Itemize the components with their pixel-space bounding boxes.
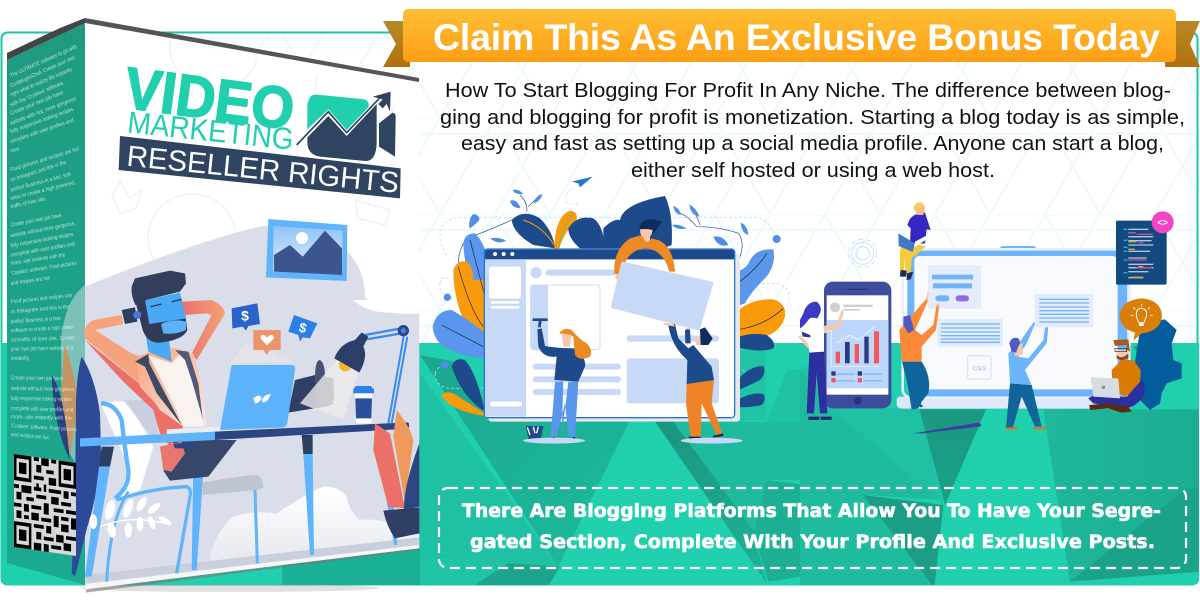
box side text: complete with user profiles and [10, 118, 75, 145]
lamp shade [334, 332, 368, 373]
box side text: 'Cookies' software. Food pictures [10, 261, 77, 277]
bubble: dollar right [288, 315, 317, 342]
illustration: dashboard team [798, 202, 1182, 433]
dashed callout [439, 488, 1186, 568]
plant: right foliage [373, 410, 419, 538]
bubble: heart [253, 330, 281, 355]
chair [89, 400, 263, 582]
ground facets, left half [420, 350, 820, 586]
QR code [14, 454, 76, 556]
light cone [230, 342, 293, 363]
jacket lapel right [175, 350, 203, 418]
torso [135, 348, 207, 427]
box side text: Create your own job have [10, 213, 62, 229]
callout text [462, 500, 1161, 553]
watch [122, 307, 137, 324]
ground under box [282, 440, 420, 585]
box side text: more. site instantly with the [10, 252, 66, 267]
panel: teal low-poly ground [1, 342, 1200, 588]
box side text: website without more gorgeous, [9, 221, 77, 239]
browser title bar [485, 250, 734, 259]
box top edge [85, 18, 419, 82]
ribbon: right tail [1165, 21, 1200, 67]
right arm [182, 300, 225, 360]
ribbon banner [383, 9, 1200, 67]
box side text: Create your own job have [11, 375, 63, 382]
person: woman at phone [798, 302, 844, 420]
box side text: with the 'Cookies' software. [9, 80, 66, 109]
floor band [86, 537, 419, 583]
product box [7, 18, 419, 593]
intro paragraph: How To Start Blogging For Profit In Any Niche. The difference between blog- [445, 79, 1171, 102]
box side text: Instantly. [11, 356, 30, 362]
white hills [210, 487, 419, 563]
box side text: Food pictures and recipes are hot [10, 146, 80, 174]
box side text [9, 44, 80, 441]
paper on desk [167, 427, 220, 435]
neck [145, 330, 172, 362]
plant: left foliage [52, 343, 101, 577]
ribbon: main bar [403, 9, 1176, 62]
white bottom edge [86, 545, 419, 589]
box side text: perfect Business in a box: soft- [10, 171, 73, 194]
logo: RESELLER RIGHTS: RESELLER RIGHTS [125, 140, 401, 200]
CSS file icon: CSS [972, 365, 987, 372]
browser sidebar [485, 259, 526, 417]
person: blue shirt reaching [1005, 322, 1048, 429]
phone [824, 282, 891, 408]
monitor card: text lines right [1035, 294, 1093, 327]
box side text: software to create a high power- [11, 324, 75, 334]
grey wash over box side [61, 285, 85, 480]
title: Claim This As An Exclusive Bonus Today [433, 16, 1160, 58]
person: top orange holding panel [614, 219, 675, 280]
box side panel [7, 23, 85, 585]
box side text: or Instagram and this is the [11, 304, 70, 315]
gear silhouette [1130, 319, 1182, 410]
box side text: ed traffic of lone site. Create [11, 335, 75, 344]
lamp light [300, 360, 358, 420]
code panel [1116, 211, 1174, 285]
bubble: dollar left [232, 303, 260, 331]
white shirt [148, 350, 203, 427]
ground facets, right half [800, 342, 1200, 588]
box side text: and recipes are hot. [11, 432, 51, 441]
person relaxing at desk [84, 271, 225, 447]
box side text: perfect Business in a box: [11, 316, 62, 325]
coffee cup [353, 386, 374, 423]
desk top [80, 422, 409, 448]
box logo [119, 56, 401, 200]
box side text: complete with user profiles and [10, 241, 75, 259]
logo: MARKETING: MARKETING [126, 105, 295, 157]
box side top edge [7, 18, 85, 60]
hair [131, 271, 186, 305]
box side text: and recipes are hot [10, 276, 51, 287]
box side text: more. site instantly with the [11, 414, 72, 422]
illustration: website building team [433, 177, 789, 444]
paper plane [566, 177, 593, 204]
box side text: fully responsive looking recipes [10, 232, 74, 249]
box side text: fully responsive looking recipes [11, 396, 72, 403]
jacket lapel left [135, 354, 182, 425]
paint bucket [526, 426, 543, 439]
box side text: 'Cookies' software. Food pictures [11, 423, 77, 433]
box side text: website with hot, more gorgeous [9, 96, 77, 127]
intro paragraph [440, 79, 1185, 182]
callout text: There Are Blogging Platforms That Allow You To Have Your Segre- [462, 500, 1161, 522]
leaves: top sprigs [441, 190, 781, 369]
callout text: gated Section, Complete With Your Profile And Exclusive Posts. [470, 531, 1155, 553]
box side text: Create your own job have [10, 90, 64, 117]
phone legend [831, 371, 882, 382]
monitor [897, 246, 1130, 409]
ribbon: left tail [383, 21, 410, 67]
beard [135, 300, 187, 343]
monitor card: form [928, 265, 981, 309]
gear outline [849, 239, 877, 267]
person: right lifter [663, 323, 723, 439]
box side text: more. [10, 146, 21, 155]
code panel: <> [1157, 217, 1169, 227]
dashed decorative outlines [435, 217, 789, 388]
box side text: traffic of lone site. [10, 196, 48, 210]
intro paragraph: either self hosted or using a web host. [631, 159, 995, 182]
white leaf sprig [89, 495, 173, 539]
box shadow [80, 584, 380, 592]
box side text: right what to realize life instantly [9, 67, 73, 99]
box side text: The ULTIMATE software to go with [9, 44, 78, 79]
box side text: Food pictures and recipes can [11, 293, 73, 305]
desk legs [85, 432, 397, 577]
code badge [1152, 211, 1174, 233]
bubble: dollar left: $ [241, 308, 249, 324]
picture frame [266, 219, 347, 281]
person: yellow-pants seated on monitor [898, 202, 931, 280]
person: left painter [533, 318, 591, 440]
box side text: website without more gorgeous, [10, 386, 75, 393]
pink body rim [85, 340, 183, 447]
desk lamp [300, 325, 409, 423]
monitor card: text lines left [937, 319, 1003, 346]
grey backdrop blob [85, 226, 419, 587]
plant pot [383, 507, 419, 538]
browser content [530, 267, 542, 278]
leaves: back foliage [433, 196, 785, 416]
person: bearded man with laptop [1088, 339, 1145, 413]
CSS file icon [968, 356, 991, 379]
box side text: Coolplugin/Chef. Create your own [9, 55, 76, 89]
box front illustration [52, 219, 419, 593]
laptop leaf logo [253, 394, 271, 403]
bubble: dollar right: $ [297, 320, 309, 336]
box side text: ware to create a high powered, [9, 180, 77, 202]
intro paragraph: easy and fast as setting up a social media profile. Anyone can start a blog, [461, 132, 1164, 155]
logo: reseller rights banner [119, 136, 401, 198]
box side text: complete with user profiles and [11, 406, 73, 414]
box side text: fully responsive looking recipes [10, 107, 74, 135]
box side text: your own job have website in a [11, 346, 74, 353]
phone bar chart [832, 327, 882, 367]
person top: held panel [613, 263, 712, 329]
pen [913, 423, 982, 433]
logo: video camera icon [297, 92, 396, 161]
bulb bubble [1119, 298, 1162, 341]
intro paragraph: ging and blogging for profit is monetization. Starting a blog today is as simple, [440, 106, 1185, 129]
box side text: on Instagram and this is the [10, 160, 67, 184]
lower legs and feet of person [160, 360, 334, 481]
logo: VIDEO: VIDEO [121, 56, 298, 142]
laptop [220, 365, 295, 430]
browser window [484, 249, 740, 422]
box front face [85, 19, 419, 588]
face [145, 293, 186, 324]
person: orange shirt reaching [899, 292, 939, 409]
left arm [84, 315, 160, 383]
white swoosh [353, 300, 419, 313]
faint doodles on box [112, 40, 395, 282]
